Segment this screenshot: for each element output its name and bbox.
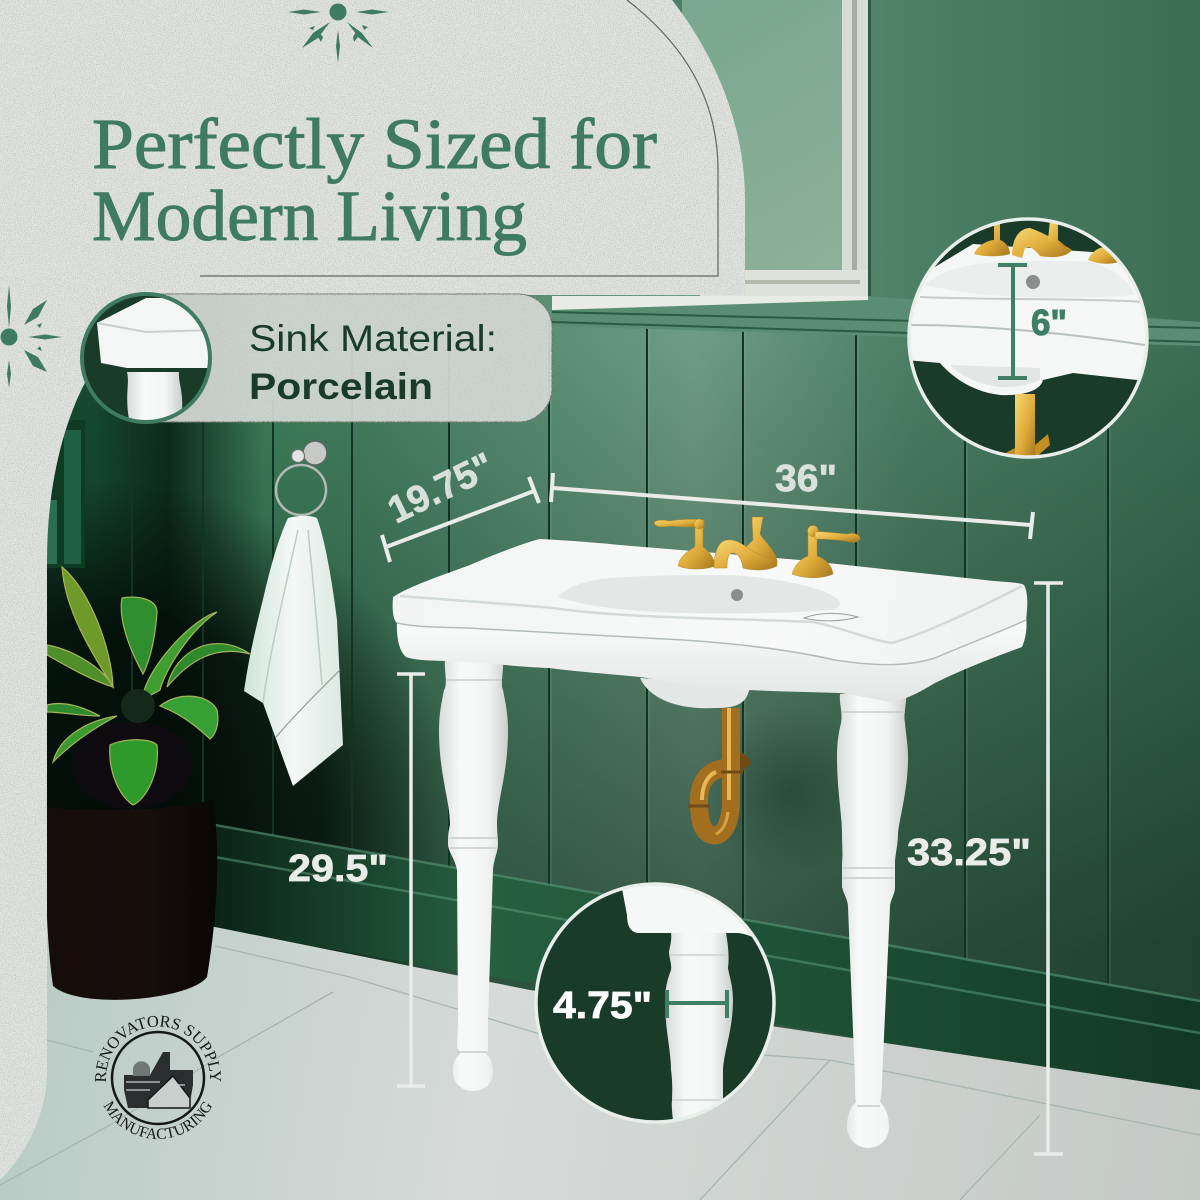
dimension: height 29.5: 29.5" (288, 848, 388, 890)
dimension: width 36: 36" (775, 458, 837, 500)
basin bowl (558, 575, 840, 614)
dimension: height 33.25: 33.25" (907, 832, 1031, 874)
drain (731, 589, 743, 601)
chair rail moulding (552, 296, 1200, 346)
house mark (124, 1052, 193, 1108)
detail circle: 6 inch bowl depth (905, 219, 1150, 459)
green measure line (666, 990, 728, 1018)
dimension: depth 19.75 (382, 445, 539, 562)
hanging towel (244, 516, 343, 786)
detail circle: 4.75 inch leg width: 4.75" (553, 985, 652, 1027)
dimension: width 36 (551, 458, 1033, 539)
title: Modern Living (92, 176, 527, 256)
icon: top star ornament (288, 4, 389, 63)
wicker basket (46, 799, 217, 1000)
green measure line (998, 265, 1027, 378)
logo: Renovators Supply Manufacturing: RENOVATORS SUPPLY (95, 1016, 221, 1082)
detail circle: 4.75 inch leg width (536, 878, 774, 1125)
right leg (837, 694, 908, 1148)
right leg rings (842, 712, 905, 1106)
rolled lip shading (400, 586, 1022, 643)
drain trap (688, 708, 747, 835)
left wall mirror strip (47, 420, 85, 568)
floor tiles (0, 884, 1200, 1200)
rim lines (397, 620, 1026, 665)
inner black pot (72, 721, 192, 809)
sink product (393, 517, 1027, 1148)
top surface (393, 539, 1027, 667)
leaves (47, 567, 250, 805)
title: Perfectly Sized for (92, 104, 657, 184)
potted plant (46, 567, 250, 1000)
overflow (804, 613, 858, 621)
left leg (439, 658, 508, 1091)
decorative arch outline (200, 0, 718, 276)
dimension: height 29.5 (288, 673, 425, 1087)
callout text: Sink Material: (249, 318, 497, 359)
mirror with frame (670, 0, 871, 300)
towel ring (276, 441, 327, 515)
dimension: height 33.25 (907, 582, 1063, 1155)
logo: Renovators Supply Manufacturing (95, 1016, 221, 1140)
panel: cream speckled background (0, 0, 745, 1180)
baseboard (215, 825, 1200, 1095)
gold faucet (654, 517, 860, 578)
logo: Renovators Supply Manufacturing: MANUFACTURING (103, 1100, 212, 1140)
callout text: Porcelain (249, 366, 433, 407)
callout: sink material (82, 294, 552, 425)
dimension: depth 19.75: 19.75" (382, 445, 501, 532)
thumbnail: sink corner (82, 294, 215, 425)
front apron (397, 615, 1027, 702)
icon: left star ornament (0, 285, 62, 388)
callout text (249, 318, 497, 407)
callout pill (120, 294, 552, 422)
basin underside bowl (640, 678, 750, 708)
left leg rings (446, 680, 502, 1052)
title (92, 104, 657, 256)
detail circle: 6 inch bowl depth: 6" (1031, 302, 1067, 343)
